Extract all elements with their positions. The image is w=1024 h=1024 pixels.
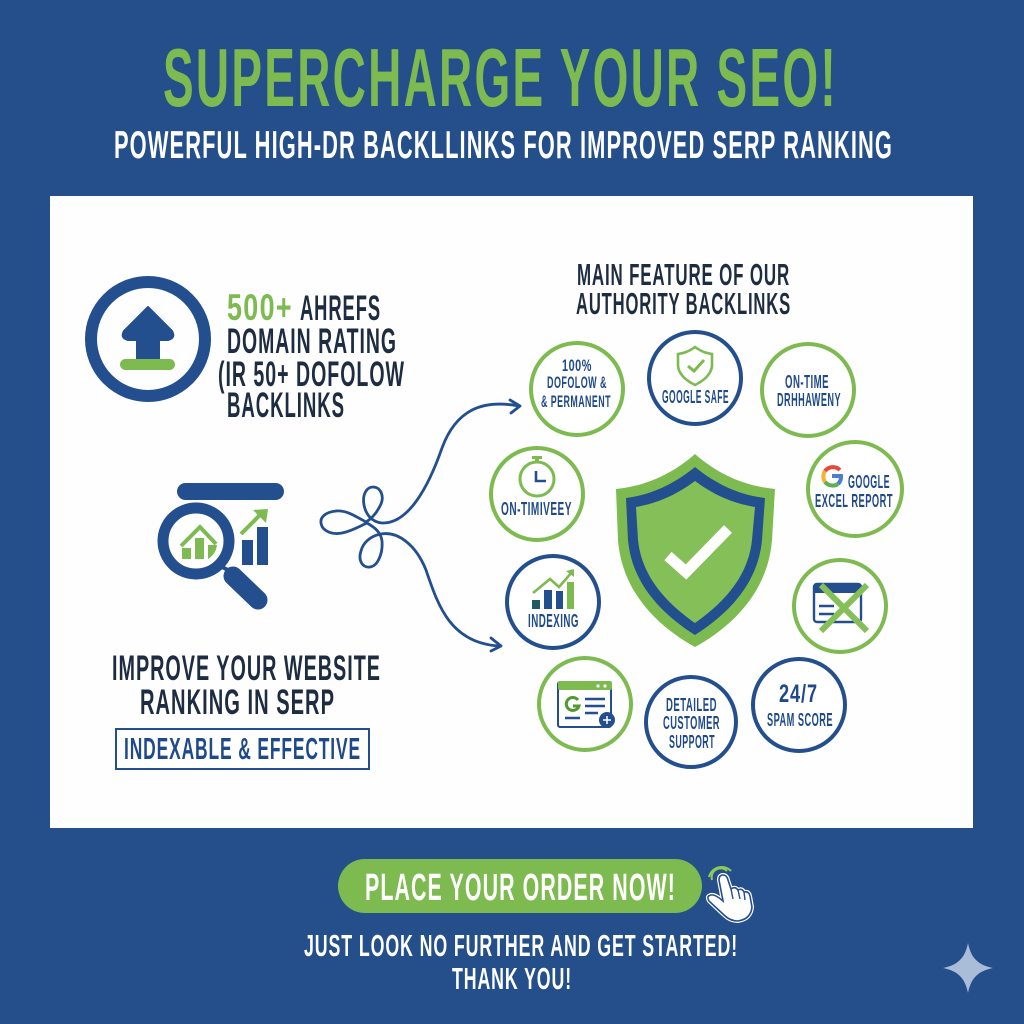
feature: 24/7 spam score: 24/7 xyxy=(779,680,818,708)
text block: improve ranking xyxy=(112,649,381,722)
feature: dofollow and permanent: & PERMANENT xyxy=(541,392,611,411)
feature: google excel report: EXCEL REPORT xyxy=(815,491,893,511)
feature: indexing xyxy=(507,556,599,648)
text block: domain rating: 500+ xyxy=(227,287,293,328)
heading: main feature: AUTHORITY BACKLINKS xyxy=(576,286,791,321)
icon: upload arrow in ring xyxy=(91,282,205,396)
feature: on-time delivery xyxy=(762,344,854,436)
feature: detailed customer support xyxy=(646,677,736,767)
heading: main feature: MAIN FEATURE OF OUR xyxy=(577,257,790,292)
panel: white content card xyxy=(50,196,973,828)
feature: detailed customer support: SUPPORT xyxy=(669,732,715,752)
feature: 24/7 spam score xyxy=(753,659,845,751)
feature: 24/7 spam score: SPAM SCORE xyxy=(767,710,833,730)
icon: magnifier with charts xyxy=(163,483,284,602)
feature: on-time timer: ON-TIMIVEEY xyxy=(501,499,572,519)
feature: google excel report xyxy=(808,442,902,536)
icon: sparkle xyxy=(943,943,993,993)
heading: main feature xyxy=(576,257,791,321)
text block: closing message: THANK YOU! xyxy=(452,961,572,996)
feature: on-time timer xyxy=(491,448,583,540)
text block: domain rating: DOMAIN RATING xyxy=(227,322,397,361)
feature: google report window xyxy=(539,658,631,750)
text block: improve ranking: RANKING IN SERP xyxy=(140,683,335,722)
feature: dofollow and permanent: DOFOLOW & xyxy=(547,373,607,392)
feature: indexing: INDEXING xyxy=(528,611,579,631)
text block: domain rating: BACKLINKS xyxy=(227,386,345,425)
feature: detailed customer support: DETAILED xyxy=(666,695,717,715)
icon: pointing hand cursor xyxy=(708,867,752,921)
icon: central shield with check xyxy=(616,454,775,647)
feature: blocked spam window xyxy=(794,560,886,652)
text block: domain rating: (IR 50+ DOFOLOW xyxy=(218,355,405,394)
feature: on-time delivery: ON-TIME xyxy=(785,372,829,392)
arrow: looped connectors to features xyxy=(321,400,520,651)
feature: google safe: GOOGLE SAFE xyxy=(662,387,729,407)
text block: closing message xyxy=(304,928,738,996)
text block: domain rating: AHREFS xyxy=(300,289,381,328)
text block: improve ranking: IMPROVE YOUR WEBSITE xyxy=(112,649,381,688)
feature: dofollow and permanent: 100% xyxy=(562,356,592,375)
feature: dofollow and permanent xyxy=(531,343,623,435)
feature: detailed customer support: CUSTOMER xyxy=(663,713,720,733)
feature: on-time delivery: DRHHAWENY xyxy=(777,390,841,410)
feature: google excel report: GOOGLE xyxy=(848,472,890,492)
badge: indexable and effective xyxy=(116,729,369,769)
feature: google safe xyxy=(649,332,741,424)
button: place your order: PLACE YOUR ORDER NOW! xyxy=(365,867,676,909)
badge: indexable and effective: INDEXABLE & EFFECTIVE xyxy=(124,731,361,766)
button: place your order xyxy=(338,859,702,913)
text block: domain rating xyxy=(218,287,405,425)
